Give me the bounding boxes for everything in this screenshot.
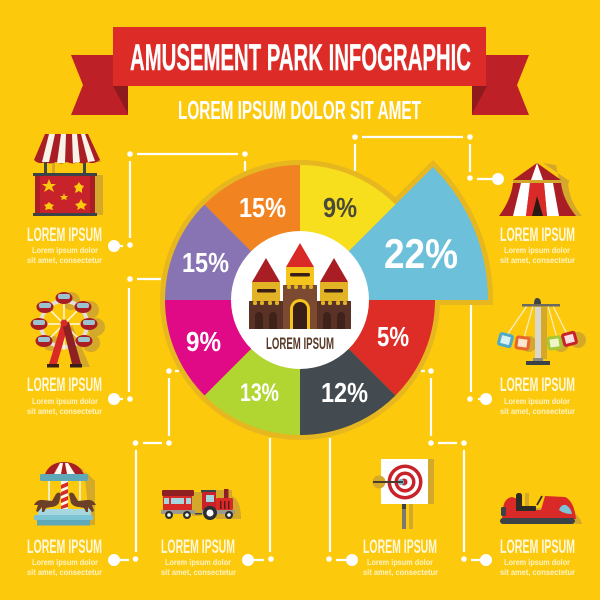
label: LOREM IPSUM bbox=[161, 537, 235, 558]
icon: target bbox=[372, 459, 434, 529]
description: Lorem ipsum dolor bbox=[504, 558, 570, 567]
description: Lorem ipsum dolor bbox=[165, 558, 231, 567]
icon: swing ride bbox=[496, 298, 586, 365]
icon: carousel bbox=[34, 462, 96, 526]
description bbox=[27, 246, 102, 265]
description: sit amet, consectetur bbox=[500, 407, 575, 416]
description bbox=[500, 246, 575, 265]
description: Lorem ipsum dolor bbox=[32, 397, 98, 406]
center circle with castle bbox=[231, 231, 369, 369]
panel: target bbox=[363, 459, 438, 577]
icon: castle bbox=[249, 243, 351, 329]
panel: carousel bbox=[27, 462, 102, 577]
value 15% orange: 15% bbox=[239, 192, 286, 223]
connector lines bbox=[108, 134, 504, 566]
icon: circus tent bbox=[499, 163, 582, 216]
icon: train bbox=[161, 489, 241, 520]
description: sit amet, consectetur bbox=[500, 568, 575, 577]
panel: ferris wheel bbox=[27, 292, 105, 416]
description bbox=[363, 558, 438, 577]
icon: ferris wheel bbox=[30, 292, 105, 368]
description: Lorem ipsum dolor bbox=[367, 558, 433, 567]
label: LOREM IPSUM bbox=[27, 375, 102, 396]
icon: food stand bbox=[33, 134, 103, 216]
label: LOREM IPSUM bbox=[363, 537, 437, 558]
description: Lorem ipsum dolor bbox=[32, 246, 98, 255]
panel: food stand bbox=[27, 134, 103, 265]
panel: circus tent bbox=[499, 163, 582, 265]
description bbox=[161, 558, 236, 577]
label: LOREM IPSUM bbox=[27, 537, 102, 558]
value 5% red: 5% bbox=[377, 321, 409, 352]
subtitle: LOREM IPSUM DOLOR SIT AMET bbox=[178, 95, 421, 125]
description: Lorem ipsum dolor bbox=[504, 246, 570, 255]
description: sit amet, consectetur bbox=[27, 568, 102, 577]
label: LOREM IPSUM bbox=[27, 225, 102, 246]
title banner bbox=[71, 27, 529, 115]
value 15% purple: 15% bbox=[182, 247, 229, 278]
panel: train bbox=[161, 489, 241, 577]
description: Lorem ipsum dolor bbox=[32, 558, 98, 567]
description: sit amet, consectetur bbox=[27, 407, 102, 416]
value 12% dark: 12% bbox=[321, 377, 368, 408]
description: sit amet, consectetur bbox=[161, 568, 236, 577]
value 13% green: 13% bbox=[240, 379, 279, 407]
description bbox=[27, 397, 102, 416]
description: sit amet, consectetur bbox=[500, 256, 575, 265]
center label: LOREM IPSUM bbox=[266, 334, 334, 353]
value 9% yellow: 9% bbox=[323, 192, 357, 223]
description: sit amet, consectetur bbox=[363, 568, 438, 577]
description bbox=[27, 558, 102, 577]
description bbox=[500, 558, 575, 577]
description bbox=[500, 397, 575, 416]
value 22% blue: 22% bbox=[384, 230, 458, 277]
description: Lorem ipsum dolor bbox=[504, 397, 570, 406]
description: sit amet, consectetur bbox=[27, 256, 102, 265]
panel: bumper car bbox=[500, 493, 582, 577]
pie chart bbox=[165, 165, 488, 435]
value 9% magenta: 9% bbox=[186, 326, 221, 357]
icon: bumper car bbox=[500, 493, 582, 524]
panel: swing ride bbox=[496, 298, 586, 416]
